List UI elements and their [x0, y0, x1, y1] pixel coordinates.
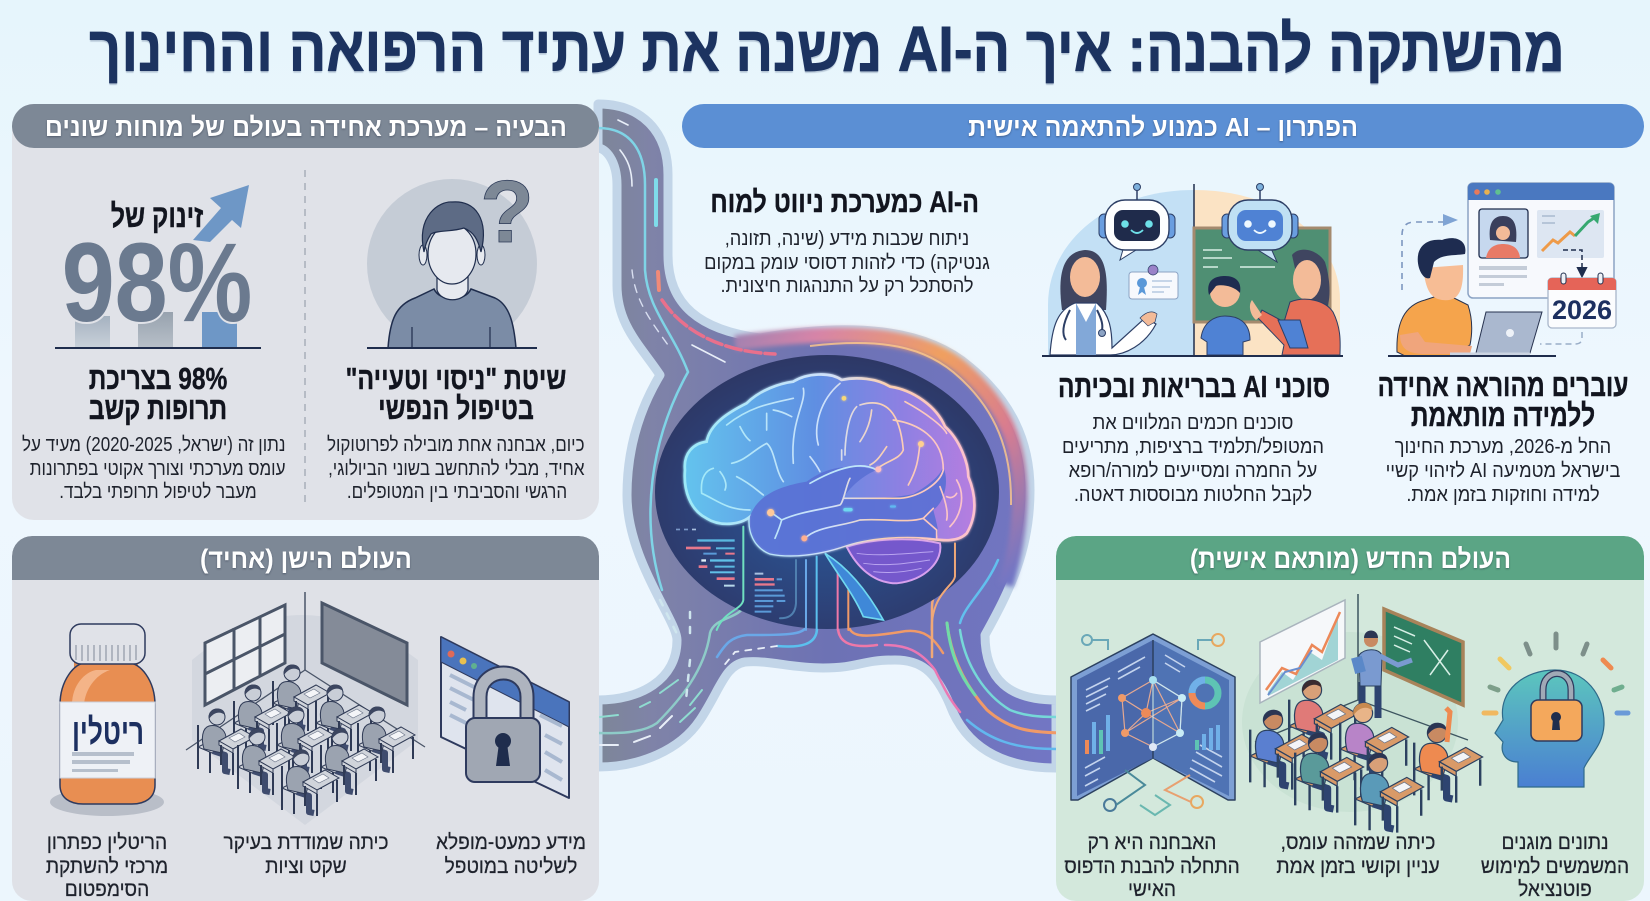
mini bars — [1085, 740, 1089, 754]
text: brain navigation: גנטיקה) כדי לזהות דסוסי עומק במקום — [704, 252, 990, 274]
icon: folded data book — [1071, 634, 1235, 815]
robot classroom — [1222, 184, 1298, 262]
panel illustrations: problem — [55, 162, 537, 502]
heading: trial and error: בטיפול הנפשי — [378, 390, 534, 426]
doctor — [1050, 250, 1157, 355]
panel: old world — [12, 536, 599, 901]
cerebellum — [847, 539, 940, 583]
header: old world: העולם הישן (אחיד) — [200, 544, 411, 574]
main title: מהשתקה להבנה: איך ה-AI משנה את עתיד הרפואה והחינוך — [89, 13, 1565, 85]
chalkboard — [1194, 228, 1330, 322]
text: brain navigation: להסתכל רק על התנהגות חיצונית. — [720, 275, 974, 297]
text: brain navigation — [704, 228, 990, 297]
dashed flow arrow — [1402, 222, 1443, 290]
teacher — [1250, 250, 1340, 355]
header: solution — [682, 104, 1644, 148]
caption: ritalin: מרכזי להשתקת — [46, 854, 168, 878]
connectors — [1082, 634, 1224, 815]
panel illustrations: solution — [1042, 182, 1617, 357]
chart: rising bars and arrow — [55, 185, 261, 348]
caption: classroom: כיתה שמודדת בעיקר — [223, 831, 389, 854]
network graph — [1122, 680, 1182, 747]
text: AI agents: המטופל/תלמיד ברציפות, מתריעים — [1062, 436, 1324, 458]
header: new world: העולם החדש (מותאם אישית) — [1189, 544, 1511, 574]
calendar 2026 — [1548, 273, 1616, 328]
heading: personalised learning: ללמידה מותאמת — [1411, 398, 1595, 433]
icon: question mark: ? — [480, 162, 534, 261]
caption: information: מידע כמעט-מופלא — [436, 831, 586, 854]
text: AI agents: על החמרה ומסייעים למורה/רופא — [1069, 460, 1317, 482]
road and ring around the brain — [590, 104, 1070, 768]
panel: solution — [682, 104, 1644, 506]
big number: 98% — [62, 220, 252, 345]
caption: information — [436, 831, 586, 878]
text: ADHD medication: מעבר לטיפול תרופתי בלבד. — [59, 481, 257, 503]
caption: diagnosis: האישי — [1128, 878, 1176, 901]
panel: new world — [1056, 536, 1644, 901]
text: brain navigation: ניתוח שכבות מידע (שינה, תזונה, — [725, 228, 969, 250]
label: jump of: זינוק של — [111, 198, 203, 234]
brain oval backdrop — [655, 355, 999, 629]
text: trial and error — [327, 434, 584, 503]
cerebrum — [685, 375, 974, 555]
icon: AI agents in health and classroom — [1042, 184, 1343, 356]
icon: responsive classroom — [1242, 594, 1483, 833]
icon: confused person — [367, 162, 537, 349]
heading: personalised learning: עוברים מהוראה אחידה — [1378, 368, 1628, 403]
icon: personalised learning — [1388, 183, 1616, 356]
header: new world — [1056, 536, 1644, 580]
text: ADHD medication: נתון זה (ישראל, 2020-2025) מעיד על — [22, 434, 286, 456]
caption: protected data: נתונים מוגנים — [1501, 831, 1609, 854]
brain illustration — [676, 375, 974, 630]
panel illustrations: new world — [1070, 594, 1630, 833]
book text lines — [1085, 655, 1222, 786]
calendar 2026: 2026 — [1552, 295, 1612, 325]
panel: problem — [12, 104, 599, 520]
text: personalised learning: למידה וחוזקות בזמן אמת. — [1406, 484, 1600, 506]
text: AI agents — [1062, 412, 1324, 506]
text: ADHD medication: עומס מערכתי וצורך אקוטי בפתרונות — [30, 458, 285, 480]
icon: traditional classroom — [186, 592, 425, 825]
caption: ritalin — [46, 831, 168, 901]
caption: ritalin: הריטלין כפתרון — [47, 831, 167, 854]
caption: diagnosis — [1064, 831, 1240, 901]
header: problem: הבעיה – מערכת אחידה בעולם של מוחות שונים — [44, 112, 566, 142]
text: personalised learning — [1386, 436, 1620, 506]
caption: diagnosis: התחלה להבנת הדפוס — [1064, 854, 1240, 878]
heading: trial and error — [346, 361, 566, 426]
caption: information: לשליטה במוטפל — [445, 854, 577, 878]
heading: ADHD medication — [89, 361, 227, 426]
text: personalised learning: החל מ-2026, מערכת החינוך — [1395, 436, 1611, 458]
person at laptop — [1397, 295, 1472, 356]
caption: smart classroom: עניין וקושי בזמן אמת — [1276, 854, 1440, 878]
heading: ADHD medication: 98% בצריכת — [89, 361, 227, 396]
text: personalised learning: בישראל מטמיעה AI לזיהוי קשיי — [1386, 460, 1620, 482]
caption: smart classroom: כיתה שמזהה עומס, — [1281, 831, 1435, 854]
brain stem — [825, 553, 883, 620]
caption: classroom — [223, 831, 389, 878]
header: old world — [12, 536, 599, 580]
teacher — [1351, 630, 1412, 718]
text: trial and error: הרגשי והסביבתי בין המטופלים. — [347, 481, 567, 503]
caption: ritalin: הסימפטום — [65, 878, 149, 901]
caption: protected data: פוטנציאל — [1518, 878, 1592, 901]
icon: medicine bottle — [50, 624, 164, 816]
label: bottle name: ריטלין — [72, 711, 144, 752]
temporal lobe — [750, 467, 946, 555]
text: AI agents: סוכנים חכמים המלווים את — [1093, 412, 1293, 434]
brain sulci — [701, 383, 962, 538]
heading: trial and error: שיטת "ניסוי וטעייה" — [346, 361, 566, 396]
chalkboard — [1384, 609, 1463, 705]
text lines — [1479, 266, 1527, 270]
center text block: AI as brain navigation — [704, 186, 990, 297]
caption: protected data — [1481, 831, 1629, 901]
ID card — [1129, 265, 1178, 299]
heading: ADHD medication: תרופות קשב — [89, 390, 227, 426]
caption: smart classroom — [1276, 831, 1440, 878]
text: AI agents: לקבל החלטות מבוססות דאטה. — [1074, 484, 1312, 506]
header: solution: הפתרון – AI כמנוע להתאמה אישית — [968, 112, 1358, 142]
text: trial and error: כיום, אבחנה אחת מובילה לפרוטוקול — [327, 434, 584, 456]
heading: brain navigation: ה-AI כמערכת ניווט למוח — [710, 186, 979, 219]
heading: personalised learning — [1378, 368, 1628, 433]
trend chart — [1537, 210, 1604, 258]
robot medical — [1099, 184, 1175, 260]
boy — [1201, 276, 1250, 355]
text: ADHD medication — [22, 434, 286, 503]
icon: head with lock — [1484, 634, 1628, 787]
caption: diagnosis: האבחנה היא רק — [1088, 831, 1216, 854]
brain glow points — [767, 396, 924, 541]
donut chart — [1192, 680, 1218, 706]
circuit wires under brain — [717, 527, 955, 630]
road lane lines — [590, 120, 1070, 749]
panel illustrations: old world — [50, 592, 570, 824]
heading: AI agents: סוכני AI בבריאות ובכיתה — [1058, 369, 1330, 404]
avatar card — [1479, 209, 1528, 258]
caption: classroom: שקט וציות — [265, 854, 347, 878]
header: problem — [12, 104, 599, 148]
text: trial and error: אחיד, מבלי להתחשב בשוני הביולוגי, — [328, 458, 584, 480]
icon: locked browser window — [441, 637, 569, 798]
caption: protected data: המשמשים למימוש — [1481, 854, 1629, 878]
column divider — [304, 170, 306, 503]
code snippets — [676, 529, 785, 613]
data chart on wall — [1260, 600, 1345, 703]
